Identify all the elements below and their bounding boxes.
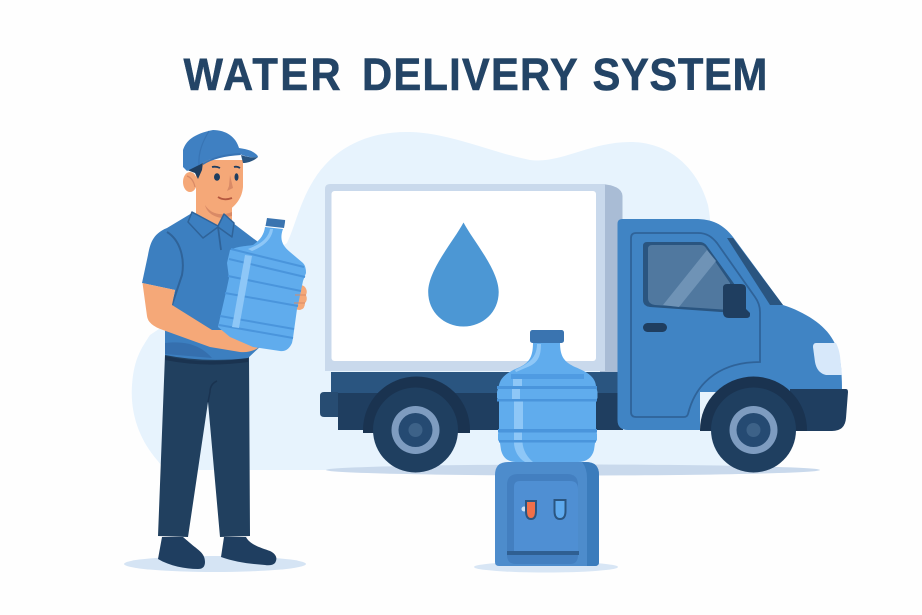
hair <box>187 162 203 179</box>
polo shirt <box>142 213 262 360</box>
mouth <box>218 197 232 199</box>
truck cab <box>618 219 848 431</box>
front bumper <box>790 389 848 431</box>
ground shadow: water cooler <box>474 562 618 572</box>
cap <box>530 330 564 343</box>
water bottle carried <box>218 218 306 351</box>
highlight <box>512 379 533 462</box>
icon: water drop <box>428 222 499 326</box>
headlight <box>813 343 842 375</box>
eyes <box>214 173 220 181</box>
title: DELIVERY <box>362 51 578 100</box>
windshield <box>727 238 783 305</box>
arm and hand <box>142 283 258 352</box>
water cooler <box>495 462 599 566</box>
right shoe <box>221 537 276 565</box>
background blob <box>132 132 750 470</box>
door handle <box>643 323 667 332</box>
highlight <box>232 255 252 328</box>
blue tap <box>554 500 566 519</box>
head <box>196 160 243 212</box>
door outline <box>631 233 760 417</box>
front wheel <box>700 377 807 472</box>
side mirror <box>723 284 750 318</box>
ground shadow: man <box>124 556 306 572</box>
right hand fingers <box>292 285 307 310</box>
delivery man <box>142 130 307 569</box>
neck <box>196 185 232 225</box>
water bottle on cooler <box>497 330 598 462</box>
title <box>184 51 767 100</box>
collar <box>188 212 234 238</box>
cab window <box>643 242 735 313</box>
rear wheel <box>363 376 470 472</box>
title: WATER <box>184 51 341 100</box>
truck cargo box <box>325 184 622 372</box>
truck <box>320 184 848 472</box>
truck chassis <box>320 372 623 430</box>
trousers <box>158 355 250 537</box>
cap <box>183 130 258 171</box>
ear <box>183 172 197 192</box>
ground shadow: truck <box>326 464 820 476</box>
left shoe <box>158 537 205 569</box>
nose <box>227 175 233 191</box>
title: SYSTEM <box>592 51 767 100</box>
finger lines <box>294 295 306 303</box>
red tap <box>522 501 536 519</box>
cap <box>266 218 285 228</box>
